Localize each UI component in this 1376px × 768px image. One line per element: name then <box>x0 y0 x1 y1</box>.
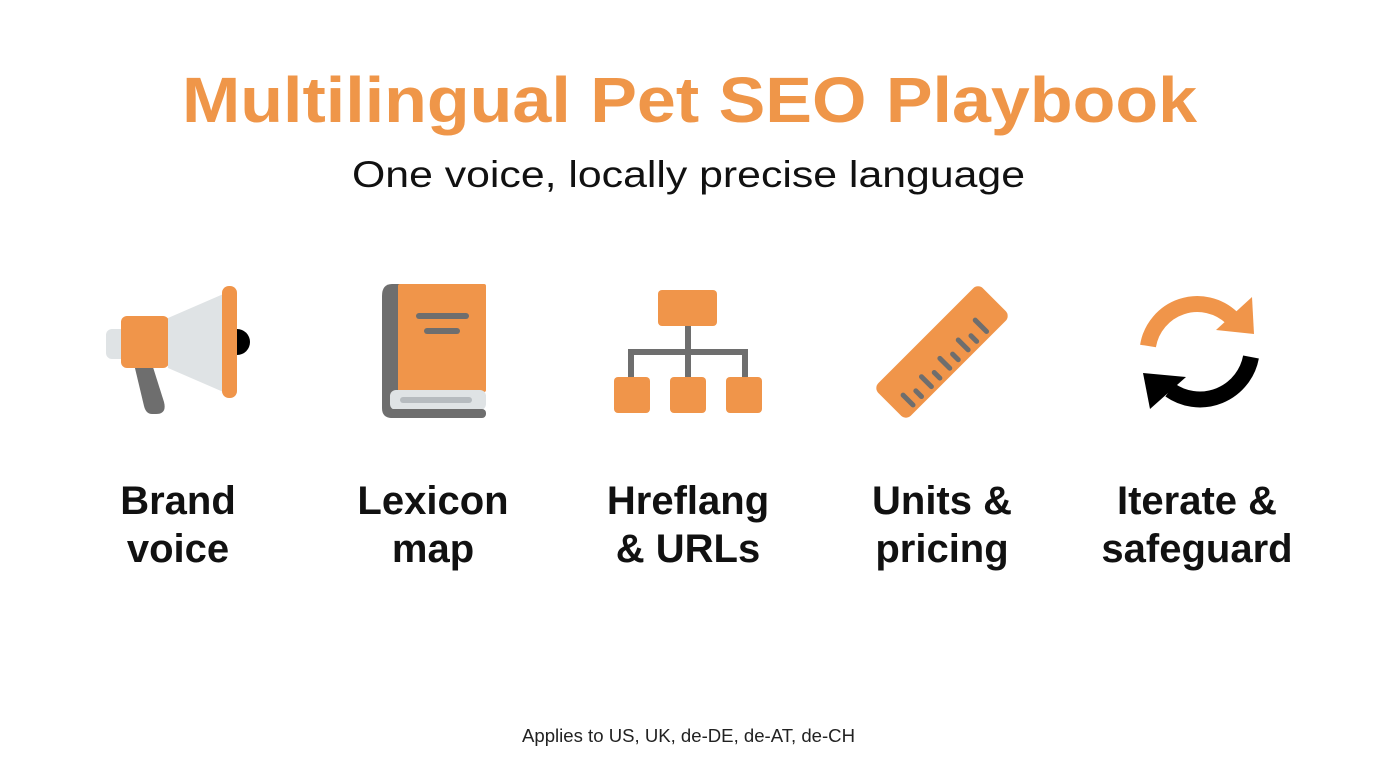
icon: megaphone <box>106 286 250 414</box>
label: brand voice <box>120 479 236 571</box>
label: brand voice: voice <box>127 527 229 571</box>
icon: refresh <box>1143 297 1254 409</box>
icon: ruler <box>873 283 1011 421</box>
label: lexicon map: Lexicon <box>357 479 509 523</box>
footer: Applies to US, UK, de-DE, de-AT, de-CH <box>522 726 855 746</box>
label: units: Units & <box>872 479 1012 523</box>
label: iterate: Iterate & <box>1117 479 1277 523</box>
label: hreflang <box>607 479 769 571</box>
label: iterate: safeguard <box>1101 527 1293 571</box>
label: units <box>872 479 1012 571</box>
subtitle: One voice, locally precise language <box>352 154 1025 195</box>
label: hreflang: & URLs <box>616 527 760 571</box>
label: lexicon map <box>357 479 509 571</box>
label: lexicon map: map <box>392 527 474 571</box>
icon: book <box>382 284 486 418</box>
label: iterate <box>1101 479 1293 571</box>
label: hreflang: Hreflang <box>607 479 769 523</box>
label: units: pricing <box>875 527 1009 571</box>
title: Multilingual Pet SEO Playbook <box>182 64 1197 136</box>
label: brand voice: Brand <box>120 479 236 523</box>
icon: hierarchy <box>614 290 762 413</box>
